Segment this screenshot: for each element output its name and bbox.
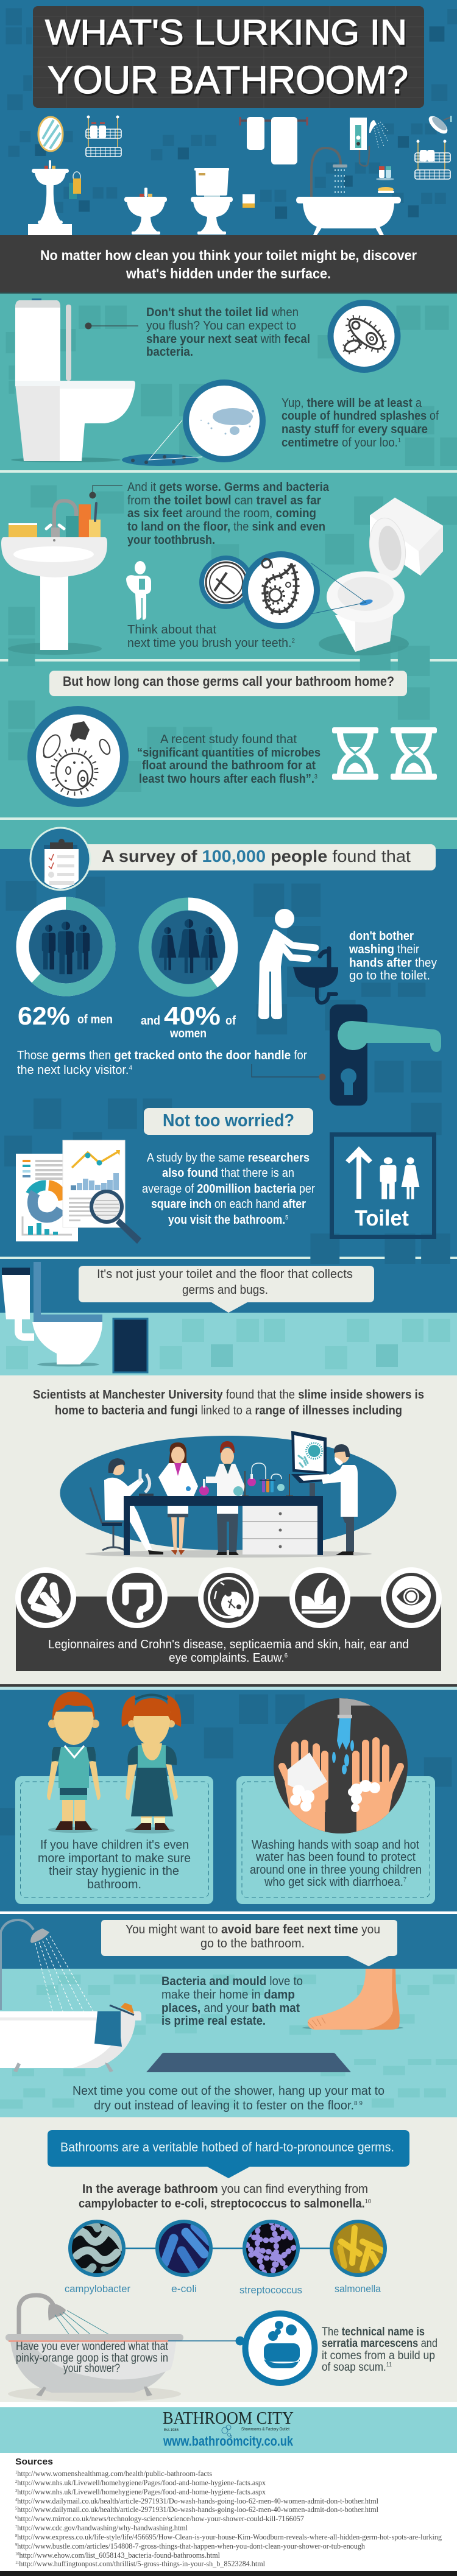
logo: bathroom city: www.bathroomcity.co.uk — [163, 2433, 294, 2449]
icon: person brushing teeth — [126, 561, 151, 620]
icon: toilet — [191, 168, 233, 235]
panel: diseases: eye complaints. Eauw. — [169, 1651, 290, 1665]
icon: splash magnifier and mat — [122, 383, 263, 466]
text: scientists: home to bacteria and fungi linked to a range of illnesses including — [55, 1404, 402, 1417]
panel: diseases: 6 — [285, 1653, 288, 1659]
flasks and tubes — [199, 1463, 293, 1496]
sources list: 1 — [15, 2470, 18, 2475]
logo: bathroom city: BATHROOM CITY — [163, 2408, 294, 2428]
text: it gets worse: to land on the floor, the sink and even — [127, 520, 325, 534]
card: hand washing: who get sick with diarrhoea. — [264, 1876, 415, 1889]
text: 40% of women: 40% — [164, 1001, 221, 1030]
heading: how long — [49, 671, 407, 696]
sources list: 8 — [15, 2533, 18, 2538]
text: 40% of women — [141, 1001, 236, 1040]
labels: germ names: salmonella — [335, 2283, 381, 2295]
text: serratia marcescens: it comes from a build up — [322, 2349, 435, 2362]
text: average bathroom: campylobacter to e-coli, streptococcus to salmonella. — [79, 2197, 365, 2211]
speech bubble: not just toilet — [79, 1266, 374, 1313]
text: serratia marcescens — [322, 2326, 438, 2374]
tagline: what's hidden under the surface. — [126, 266, 331, 281]
icon: bathroom sink with toothbrush — [1, 501, 107, 655]
icon: hanging towel — [69, 172, 81, 199]
text: 200 million bacteria: 5 — [285, 1215, 288, 1221]
title panel: YOUR BATHROOM? — [48, 58, 408, 102]
sources list: Sources — [15, 2457, 53, 2467]
tagline: No matter how clean you think your toilet might be, discover — [40, 247, 417, 263]
text: serratia marcescens: of soap scum. — [322, 2361, 394, 2374]
photo: e-coli — [157, 2221, 211, 2275]
text: don't bother washing: don't bother — [349, 930, 414, 943]
callout: toilet lid — [85, 323, 138, 329]
photo: campylobacter — [70, 2221, 124, 2275]
text: bacteria and mould: places, and your bath mat — [161, 2002, 300, 2015]
text: 200 million bacteria: A study by the same researchers — [147, 1151, 310, 1165]
text: recent study: 3 — [314, 774, 317, 780]
sources list: http://www.cdc.gov/handwashing/why-handwashing.html — [17, 2523, 188, 2532]
card: hand washing: water has been found to protect — [255, 1851, 416, 1864]
sources list: 6 — [15, 2515, 18, 2520]
sources list: 5 — [15, 2506, 18, 2511]
text: splashes: couple of hundred splashes of — [282, 409, 439, 423]
text: think about that — [127, 623, 295, 650]
text: next time: dry out instead of leaving it to fester on the floor. — [94, 2099, 353, 2112]
labels: germ names — [65, 2283, 381, 2296]
icon: skin and hair — [292, 1570, 347, 1625]
chart: 62% of men donut — [23, 903, 109, 990]
icon: isometric toilet — [311, 498, 443, 655]
sources list: 9 — [15, 2542, 18, 2547]
icon: wall shelf right — [415, 140, 450, 179]
icon: dark door — [113, 1319, 147, 1372]
sources list: 11 — [15, 2560, 19, 2565]
sources list: 3 — [15, 2488, 18, 2493]
sources list — [15, 2457, 442, 2568]
text: scientists: Scientists at Manchester University found that the slime inside showers is — [33, 1388, 424, 1402]
text: door handle germs: 4 — [129, 1065, 132, 1071]
card: hand washing: around one in three young children — [250, 1863, 422, 1877]
text: 200 million bacteria: square inch on each hand after — [151, 1198, 306, 1211]
text: door handle germs: the next lucky visitor. — [17, 1064, 130, 1077]
text: 62% of men — [18, 1001, 113, 1030]
panel: diseases — [16, 1570, 441, 1671]
card: hand washing: 7 — [403, 1877, 406, 1883]
sources list: http://www.womenshealthmag.com/health/public-bathroom-facts — [17, 2469, 212, 2478]
text: splashes — [282, 397, 439, 450]
text: splashes: 1 — [398, 437, 401, 444]
icon: germ circles — [202, 554, 317, 626]
speech bubble: avoid bare feet: go to the bathroom. — [200, 1937, 305, 1950]
person: scientist at computer — [291, 1431, 358, 1555]
sources list: http://www.huffingtonpost.com/thrillist/5-gross-things-in-your-sh_b_8523284.html — [19, 2559, 265, 2568]
icon: shower and tub — [0, 1920, 141, 2072]
text: 62% of men: 62% — [18, 1001, 70, 1030]
card: children hygiene: more important to make sure — [38, 1852, 191, 1865]
sources list: 4 — [15, 2497, 18, 2502]
text: don't bother washing: go to the toilet. — [349, 969, 430, 983]
icon: toilet sign: Toilet — [355, 1205, 409, 1230]
icon: small toilet — [2, 1262, 102, 1367]
labels: germ names: campylobacter — [65, 2283, 130, 2295]
card: children hygiene: bathroom. — [87, 1878, 141, 1891]
sources list: 7 — [15, 2524, 18, 2529]
panel: diseases: Legionnaires and Crohn's disease, septicaemia and skin, hair, ear and — [48, 1638, 409, 1651]
text: serratia marcescens: serratia marcescens and — [322, 2337, 438, 2350]
sources list: http://www.ehow.com/list_6058143_bacteria-found-bathrooms.html — [19, 2550, 220, 2560]
labels: germ names: e-coli — [171, 2283, 197, 2295]
icon: toilet sign — [331, 1134, 434, 1237]
table and drawers — [124, 1496, 323, 1555]
text: splashes: centimetre of your loo. — [282, 436, 402, 450]
text: it gets worse: from the toilet bowl can travel as far — [127, 494, 321, 507]
text: pinky-orange goop: your shower? — [63, 2362, 120, 2375]
text: recent study: float around the bathroom for at — [142, 759, 316, 772]
text: average bathroom: 10 — [365, 2198, 371, 2205]
text: 40% of women: women — [169, 1027, 207, 1040]
text: pinky-orange goop: pinky-orange goop is that grows in — [16, 2352, 168, 2365]
person: male scientist — [206, 1441, 245, 1555]
text: think about that: Think about that — [127, 623, 216, 637]
text: it gets worse — [127, 481, 330, 547]
icon: bacteria magnifier circle — [330, 303, 397, 370]
text: bacteria and mould — [161, 1975, 303, 2028]
speech bubble: avoid bare feet — [101, 1920, 397, 1966]
text: serratia marcescens: The technical name is — [322, 2326, 425, 2338]
photo: streptococcus — [244, 2221, 298, 2277]
connector: germ photos — [126, 2248, 330, 2249]
text: door handle germs — [17, 1049, 307, 1077]
text: scientists — [33, 1388, 424, 1417]
text: next time — [73, 2084, 384, 2112]
text: 200 million bacteria: average of 200million bacteria per — [142, 1182, 315, 1196]
text: serratia marcescens: 11 — [386, 2362, 392, 2368]
sources list: http://www.dailymail.co.uk/health/article-2971931/Do-wash-hands-going-loo-62-men-40-women-admit-don-t-bother.html — [17, 2496, 378, 2505]
callout: door handle — [252, 1064, 325, 1081]
illustration: bare foot — [302, 1969, 403, 2030]
heading: not too worried: Not too worried? — [163, 1111, 294, 1131]
illustration: hand washing — [274, 1698, 408, 1840]
text: recent study: least two hours after each flush”. — [139, 772, 314, 786]
text: average bathroom — [79, 2183, 371, 2211]
logo: bathroom city: Showrooms & Factory Outlet — [241, 2427, 289, 2432]
logo: bathroom city: Est.1986 — [164, 2429, 179, 2432]
text: recent study — [137, 733, 321, 786]
heading: survey: A survey of 100,000 people found that — [102, 847, 411, 866]
heading: survey — [79, 844, 436, 870]
illustration: boy — [47, 1692, 101, 1833]
card: hand washing — [236, 1776, 435, 1904]
callout: hard-to-pronounce germs — [48, 2130, 409, 2178]
chart: 40% of women donut — [145, 904, 232, 990]
text: 200 million bacteria — [142, 1151, 315, 1227]
text: next time: Next time you come out of the shower, hang up your mat to — [73, 2084, 384, 2098]
text: bacteria and mould: is prime real estate. — [161, 2014, 266, 2028]
speech bubble: not just toilet: It's not just your toilet and the floor that collects — [97, 1268, 353, 1281]
text: splashes: nasty stuff for every square — [282, 423, 428, 436]
text: average bathroom: In the average bathroom you can find everything from — [82, 2183, 368, 2196]
tagline — [40, 247, 417, 281]
text: next time: 8 9 — [354, 2100, 363, 2107]
icon: person washing hands at sink — [258, 909, 338, 1019]
text: recent study: “significant quantities of microbes — [137, 746, 321, 760]
heading: how long: But how long can those germs call your bathroom home? — [63, 674, 394, 689]
card: children hygiene — [15, 1776, 213, 1904]
text: bacteria and mould: Bacteria and mould love to — [161, 1975, 303, 1988]
text: recent study: A recent study found that — [160, 733, 297, 746]
icon: towels on rail — [240, 117, 307, 164]
text: 200 million bacteria: also found that there is an — [162, 1166, 294, 1180]
callout: sink — [89, 485, 122, 498]
icon: hourglass two — [391, 727, 437, 780]
callout: hard-to-pronounce germs: Bathrooms are a veritable hotbed of hard-to-pronounce germs. — [60, 2140, 394, 2154]
icon: bath mat — [146, 2053, 351, 2072]
text: bacteria and mould: make their home in damp — [161, 1988, 295, 2002]
speech bubble: not just toilet: germs and bugs. — [182, 1283, 268, 1297]
icon: septicaemia cell — [201, 1570, 256, 1625]
panel: big toilet illustration — [11, 298, 135, 462]
icon: microbes circle — [32, 710, 124, 803]
sources list: http://www.nhs.uk/Livewell/homehygiene/Pages/food-and-home-hygiene-facts.aspx — [17, 2478, 266, 2487]
text: it gets worse: as six feet around the room, coming — [127, 507, 316, 520]
labels: germ names: streptococcus — [239, 2284, 302, 2296]
text: 62% of men: of men — [77, 1013, 113, 1026]
text: don't shut the lid: share your next seat with fecal — [146, 333, 310, 346]
logo: bathroom city — [163, 2408, 294, 2449]
text: don't shut the lid: Don't shut the toilet lid when — [146, 306, 299, 319]
icon: shower head — [426, 113, 452, 136]
speech bubble: avoid bare feet: You might want to avoid bare feet next time you — [126, 1923, 380, 1936]
text: 200 million bacteria: you visit the bathroom. — [168, 1213, 285, 1227]
photo: salmonella — [331, 2221, 385, 2275]
sources list: http://www.dailymail.co.uk/health/article-2971931/Do-wash-hands-going-loo-62-men-40-women-admit-don-t-bother.html — [17, 2505, 378, 2514]
icon: bath bottles and soap — [376, 166, 394, 193]
icon: soap circle with connector — [168, 2313, 314, 2383]
illustration: grey bathtub with shower — [5, 2295, 183, 2402]
text: think about that: next time you brush your teeth. — [127, 637, 295, 650]
text: don't shut the lid: you flush? You can expect to — [146, 319, 296, 333]
text: pinky-orange goop — [16, 2340, 169, 2375]
text: don't shut the lid: bacteria. — [146, 345, 193, 359]
text: splashes: Yup, there will be at least a — [282, 397, 422, 410]
text: think about that: 2 — [292, 638, 295, 644]
icon: wall shelf with bottles — [86, 116, 121, 157]
card: children hygiene: their stay hygienic in the — [49, 1865, 179, 1878]
card: children hygiene: If you have children it's even — [40, 1838, 189, 1852]
text: don't bother washing: hands after they — [349, 956, 437, 970]
icon: bidet — [124, 188, 167, 235]
icon: pedestal sink — [28, 160, 72, 235]
card: hand washing: Washing hands with soap and hot — [252, 1838, 419, 1852]
title panel — [33, 6, 424, 108]
illustration: laboratory scene — [60, 1431, 396, 1558]
icon: bathtub and tap — [296, 148, 401, 235]
sources list: http://www.nhs.uk/Livewell/homehygiene/Pages/food-and-home-hygiene-facts.aspx — [17, 2487, 266, 2496]
icon: door handle — [330, 1004, 441, 1106]
heading: not too worried — [144, 1108, 313, 1135]
icon: wall mirror — [38, 117, 63, 151]
sources list: http://www.mirror.co.uk/news/technology-science/science/how-your-shower-could-kill-7166057 — [17, 2514, 304, 2523]
text: don't bother washing: washing their — [349, 943, 419, 956]
person: seated scientist — [90, 1458, 163, 1554]
text: door handle germs: Those germs then get tracked onto the door handle for — [17, 1049, 307, 1062]
text: pinky-orange goop: Have you ever wondered what that — [16, 2340, 169, 2353]
text: 40% of women: and — [141, 1014, 160, 1028]
sources list: 10 — [15, 2552, 19, 2557]
icon: crohn's intestine — [110, 1570, 165, 1625]
icon: electric shower — [350, 118, 388, 166]
icon: legionnaires bacteria — [18, 1570, 73, 1625]
chart: report pages and magnifier — [16, 1140, 141, 1244]
icon: clipboard — [30, 828, 90, 890]
text: 40% of women: of — [225, 1014, 236, 1028]
person: female scientist — [158, 1442, 198, 1555]
icon: hourglass one — [332, 727, 378, 780]
text: don't shut the lid — [146, 306, 310, 359]
icon: eye — [384, 1570, 439, 1625]
text: don't bother washing — [349, 930, 437, 983]
sources list: http://www.bustle.com/articles/154808-7-gross-things-that-happen-when-you-dont-clean-your-shower-or-tub-enough — [17, 2541, 365, 2550]
text: it gets worse: And it gets worse. Germs and bacteria — [127, 481, 330, 494]
icon: toilet paper — [243, 194, 255, 208]
text: it gets worse: your toothbrush. — [127, 534, 215, 547]
sources list: 2 — [15, 2479, 18, 2484]
illustration: girl — [121, 1695, 181, 1833]
title panel: WHAT'S LURKING IN — [45, 13, 407, 52]
